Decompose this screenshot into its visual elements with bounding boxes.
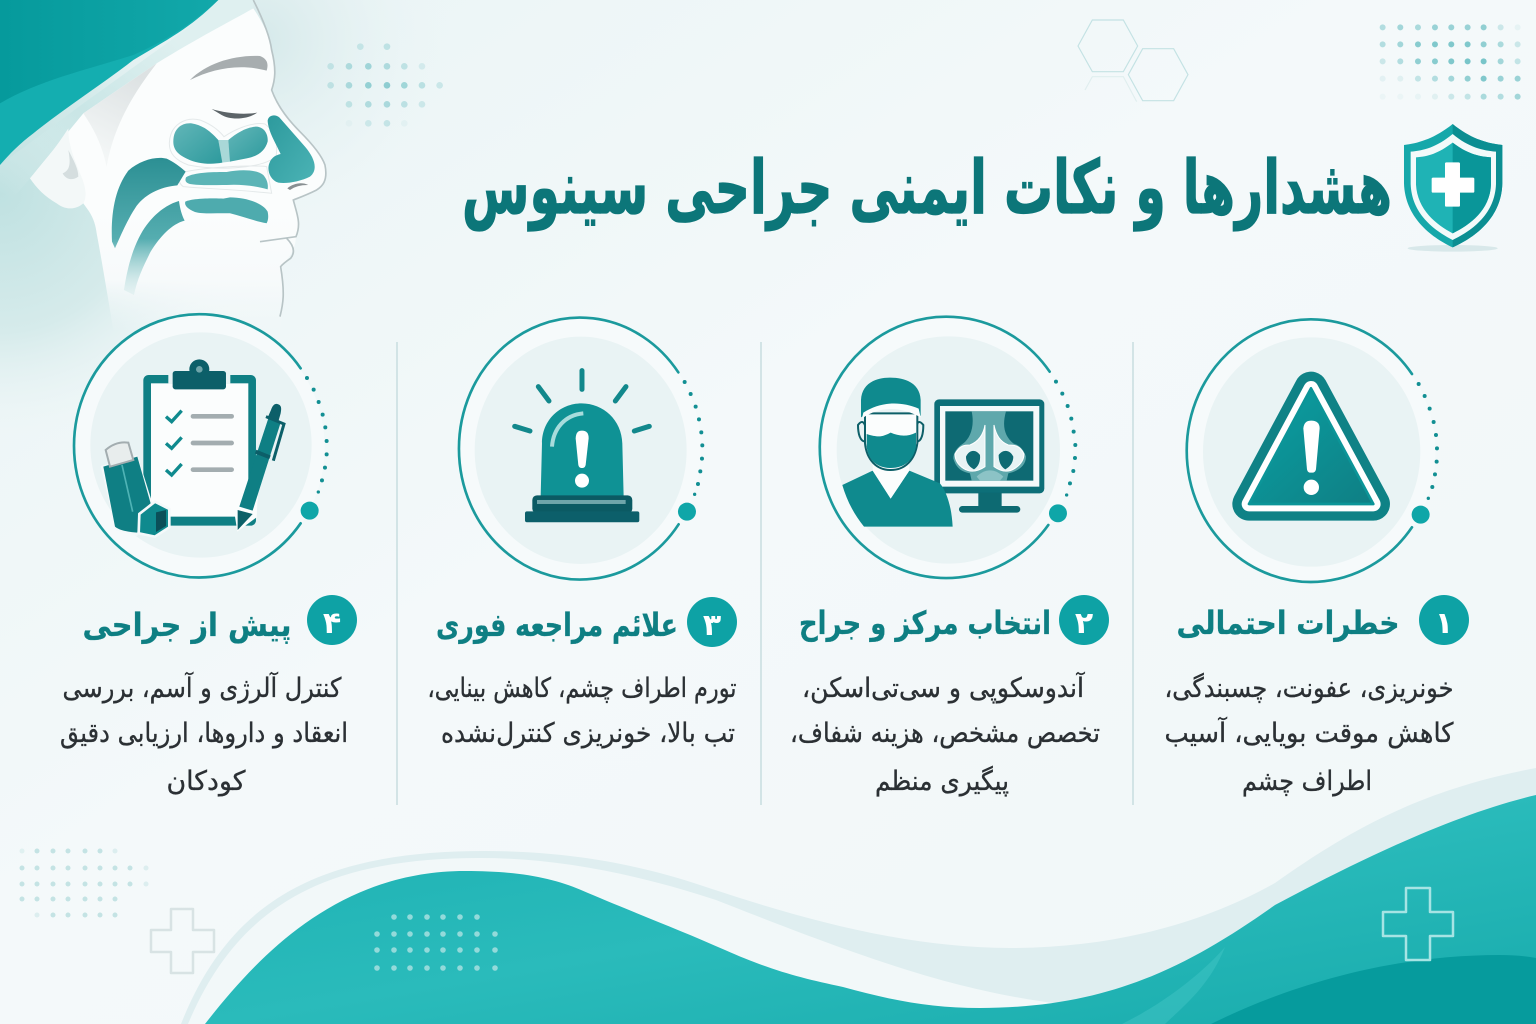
number badge 4 xyxy=(307,595,357,645)
number badge 3: ۳ xyxy=(703,608,721,643)
inhaler xyxy=(101,455,153,536)
clipboard xyxy=(143,375,256,526)
decorative hexagons xyxy=(1078,20,1188,102)
number badge 4: ۴ xyxy=(323,606,341,641)
middle turbinate xyxy=(185,170,268,189)
surgeon xyxy=(842,471,953,527)
eyebrow xyxy=(190,56,268,80)
number badge 3 xyxy=(687,597,737,647)
bottom wave pale band xyxy=(181,768,1536,1024)
number badge 2 xyxy=(1059,595,1109,645)
bottom right dark wave xyxy=(1211,955,1536,1024)
panel: 4 before surgery xyxy=(60,314,357,797)
icon: surgeon with nasal scan monitor xyxy=(820,317,1077,580)
description 3 xyxy=(428,673,736,749)
throat lower passage xyxy=(124,201,185,295)
description 4: انعقاد و داروها، ارزیابی دقیق xyxy=(60,718,348,749)
description 2 xyxy=(790,672,1100,797)
decorative dots top centre xyxy=(327,43,443,127)
column dividers xyxy=(397,342,1133,805)
icon: shield with medical cross xyxy=(1404,124,1502,252)
icon: cross outline bottom right xyxy=(1383,888,1453,960)
bottom wave lighter fold xyxy=(1122,947,1225,1024)
description 2: تخصص مشخص، هزینه شفاف، xyxy=(790,718,1100,749)
sinus halo outline xyxy=(169,119,277,193)
monitor xyxy=(934,399,1044,493)
top left dark teal wave xyxy=(0,0,218,103)
number badge 1: ۱ xyxy=(1435,606,1453,641)
number badge 2: ۲ xyxy=(1075,606,1093,641)
description 4: کودکان xyxy=(166,766,246,797)
icon: warning triangle in ring xyxy=(1187,319,1439,583)
description 1: خونریزی، عفونت، چسبندگی، xyxy=(1164,672,1454,704)
description 2: پیگیری منظم xyxy=(875,765,1009,797)
decorative dots bottom left xyxy=(20,848,148,918)
top left light teal wave xyxy=(0,0,218,165)
panel: 1 possible risks xyxy=(1164,319,1469,797)
pale band under the hood xyxy=(0,0,253,213)
heading 2: انتخاب مرکز و جراح xyxy=(799,604,1051,642)
bottom wave white band xyxy=(188,858,1060,1024)
heading 1: خطرات احتمالی xyxy=(1176,604,1400,642)
description 3: تورم اطراف چشم، کاهش بینایی، xyxy=(428,673,736,704)
description 1: کاهش موقت بویایی، آسیب xyxy=(1164,717,1454,749)
decorative dots top right xyxy=(1380,24,1521,100)
description 4 xyxy=(60,672,348,797)
description 4: کنترل آلرژی و آسم، بررسی xyxy=(62,672,342,704)
closed eye xyxy=(212,109,257,118)
nose cavity xyxy=(268,115,315,183)
description 2: آندوسکوپی و سی‌تی‌اسکن، xyxy=(802,672,1085,704)
panel: 3 urgent warning signs xyxy=(428,318,737,749)
pen xyxy=(234,470,260,532)
hair strands xyxy=(83,63,157,167)
face profile outline xyxy=(253,0,326,317)
description 3: تب بالا، خونریزی کنترل‌نشده xyxy=(441,718,735,749)
heading 4: پیش از جراحی xyxy=(82,606,292,644)
panel: 2 choosing center and surgeon xyxy=(790,317,1109,797)
lower turbinate xyxy=(185,197,268,223)
icon: alarm beacon in ring xyxy=(459,318,704,580)
description 1 xyxy=(1164,672,1454,797)
illustration: face profile with sinuses xyxy=(0,0,467,467)
icon: cross outline bottom left xyxy=(151,909,214,973)
decorative dots on wave xyxy=(374,914,498,971)
icon: clipboard inhaler and pen in ring xyxy=(74,314,329,579)
description 1: اطراف چشم xyxy=(1242,766,1372,797)
bottom main teal wave xyxy=(205,795,1536,1024)
frontal sinus xyxy=(173,123,268,164)
nostril xyxy=(287,183,308,190)
face shape xyxy=(30,8,326,330)
heading 3: علائم مراجعه فوری xyxy=(436,606,678,644)
number badge 1 xyxy=(1419,595,1469,645)
ear xyxy=(30,128,86,208)
throat upper passage xyxy=(112,158,186,248)
